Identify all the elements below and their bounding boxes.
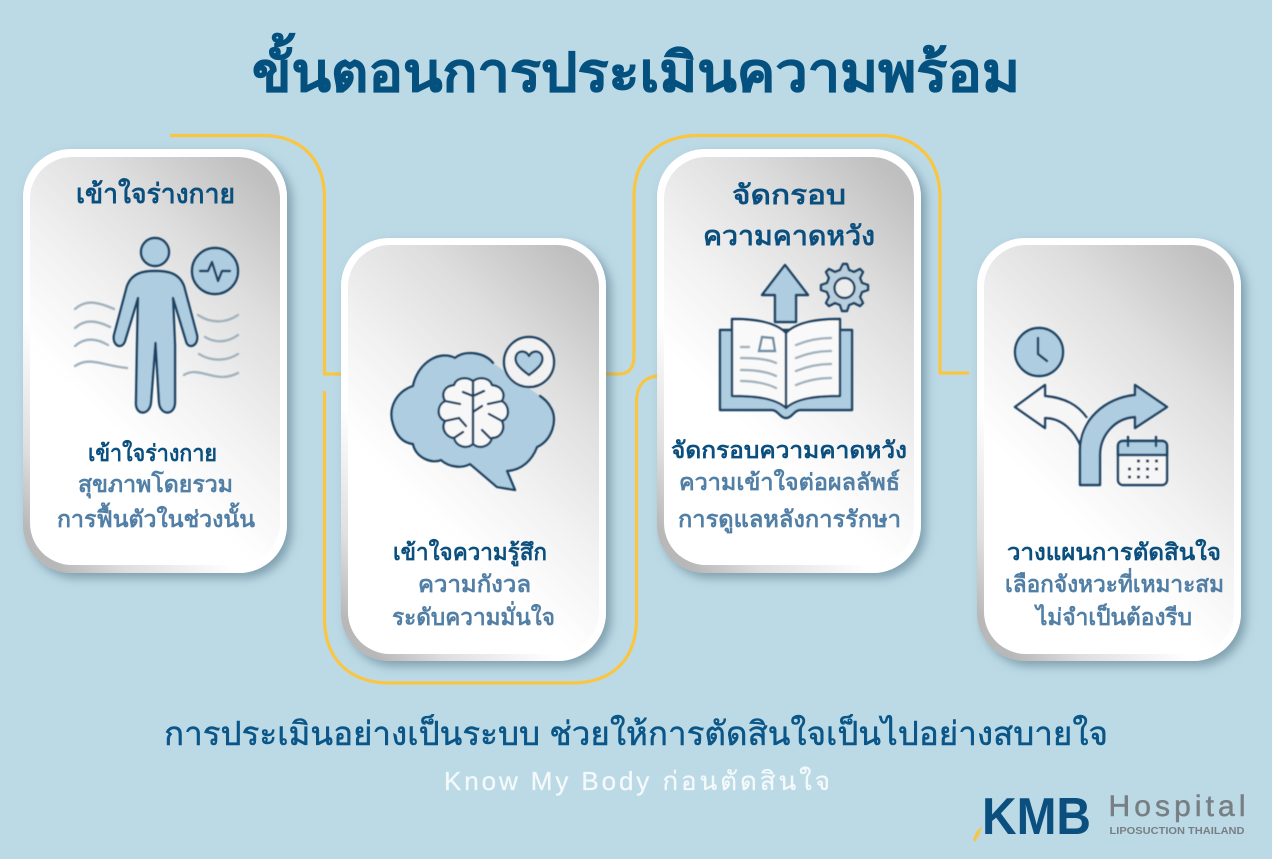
card face [348, 245, 599, 654]
card text [1005, 538, 1224, 630]
card heading [703, 180, 875, 251]
logo subtitle: LIPOSUCTION THAILAND [1110, 825, 1245, 837]
card frame [23, 149, 287, 573]
card text: ไม่จำเป็นต้องรีบ [1033, 602, 1192, 630]
connector: step 1 to step 2 [170, 136, 342, 374]
card text: การดูแลหลังการรักษา [678, 506, 901, 534]
card text: เข้าใจร่างกาย [88, 439, 217, 466]
card text: เข้าใจความรู้สึก [393, 538, 547, 567]
card frame [977, 238, 1241, 661]
panel: understand body [23, 149, 287, 573]
panel: frame expectations [657, 149, 921, 573]
icon: brain and heart [392, 337, 554, 490]
panel: plan decision [977, 238, 1241, 661]
logo: KMB Hospital [973, 788, 1246, 846]
card heading: ความคาดหวัง [703, 221, 875, 251]
card text: ระดับความมั่นใจ [392, 600, 555, 630]
card text: วางแผนการตัดสินใจ [1007, 538, 1221, 565]
connector: step 2 over step 3 to step 4 [605, 136, 969, 374]
card frame [341, 238, 606, 661]
card text: สุขภาพโดยรวม [78, 470, 233, 499]
icon: book, arrow and gear [720, 264, 868, 418]
tagline: Know My Body ก่อนตัดสินใจ [444, 766, 830, 796]
card text: ความเข้าใจต่อผลลัพธ์ [679, 468, 900, 495]
card face [664, 157, 914, 565]
logo accent [973, 826, 982, 842]
icon: body with pulse [75, 238, 238, 412]
card text [57, 439, 255, 532]
connector: step 2 loop under card to step 3 [324, 376, 658, 683]
card frame [657, 149, 921, 573]
card heading: เข้าใจร่างกาย [76, 178, 235, 209]
card text: เลือกจังหวะที่เหมาะสม [1005, 567, 1224, 597]
card text: จัดกรอบความคาดหวัง [671, 437, 907, 463]
card heading: จัดกรอบ [732, 180, 846, 210]
logo hospital: Hospital [1108, 790, 1246, 823]
card face [984, 245, 1234, 654]
card text [671, 437, 907, 534]
card text: ความกังวล [418, 571, 531, 597]
logo wordmark: KMB [982, 788, 1091, 846]
card text [392, 538, 555, 630]
icon: clock, fork arrows and calendar [1015, 328, 1167, 485]
summary statement: การประเมินอย่างเป็นระบบ ช่วยให้การตัดสินใจเป็นไปอย่างสบายใจ [164, 714, 1108, 752]
card text: การฟื้นตัวในช่วงนั้น [57, 502, 255, 532]
card face [30, 157, 280, 565]
panel: understand feelings [341, 238, 606, 661]
title: ขั้นตอนการประเมินความพร้อม [252, 33, 1020, 103]
